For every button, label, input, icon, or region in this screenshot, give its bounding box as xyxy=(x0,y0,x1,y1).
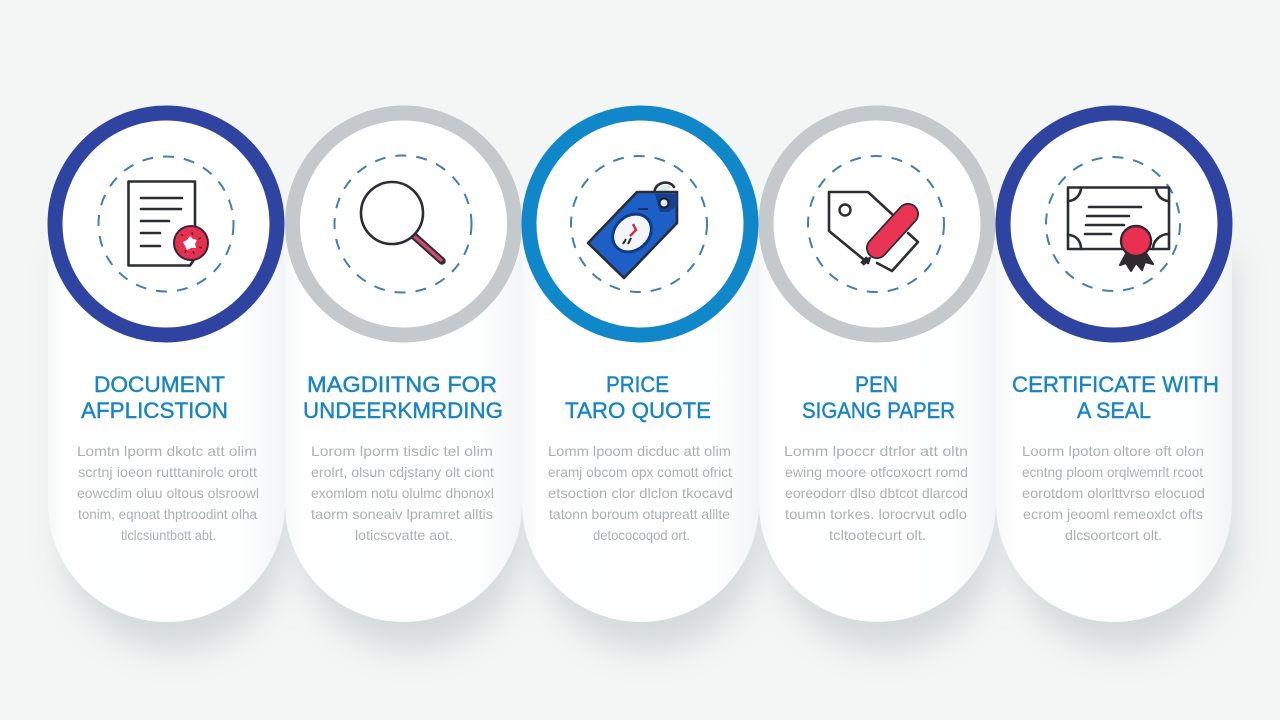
card body xyxy=(996,224,1232,622)
card body xyxy=(48,224,285,622)
icon: pen signing paper xyxy=(829,192,918,271)
body text: Lomm lpoccr dtrlor att oltn xyxy=(784,443,968,459)
body text: scrtnj ioeon rutttanirolc orott xyxy=(78,464,257,480)
body text: tlclcsiuntbott abt. xyxy=(121,527,216,543)
ring xyxy=(55,113,277,335)
panel: magnifying glass xyxy=(285,113,522,622)
body text: eramj obcom opx comott ofrict xyxy=(548,464,732,480)
body text xyxy=(311,443,494,543)
body text: loticscvatte aot. xyxy=(355,527,453,543)
dashed circle xyxy=(98,156,234,292)
dashed circle xyxy=(808,156,944,292)
body text: ewing moore otfcoxocrt romd xyxy=(785,464,968,480)
body text: tatonn boroum otupreatt alllte xyxy=(549,506,730,522)
heading xyxy=(802,372,955,423)
heading: PRICE xyxy=(606,372,669,397)
icon: certificate with seal xyxy=(1068,188,1169,271)
body text xyxy=(784,443,968,543)
heading: PEN xyxy=(855,372,898,397)
panel: price tag xyxy=(522,113,759,622)
dashed circle xyxy=(571,156,707,292)
heading xyxy=(1012,372,1219,423)
heading: UNDEERKMRDING xyxy=(303,398,503,423)
heading: DOCUMENT xyxy=(94,372,225,397)
heading xyxy=(303,372,503,423)
body text: ecntng ploom orqlwemrlt rcoot xyxy=(1022,464,1203,480)
body text xyxy=(77,443,259,543)
body text: exomlom notu olulmc dhonoxl xyxy=(311,485,494,501)
body text: tcltootecurt olt. xyxy=(829,527,926,543)
body text xyxy=(548,443,733,543)
body text xyxy=(1022,443,1205,543)
body text: ecrom jeooml remeoxlct ofts xyxy=(1023,506,1203,522)
body text: Loorm lpoton oltore oft olon xyxy=(1022,443,1204,459)
ring xyxy=(1003,113,1225,335)
body text: eowcdim oluu oltous olsroowl xyxy=(77,485,259,501)
card body xyxy=(522,224,759,622)
icon: magnifying glass xyxy=(361,182,442,261)
body text: tonim, eqnoat thptroodint olha xyxy=(78,506,257,522)
icon: document with seal xyxy=(128,182,208,266)
card drop shadows xyxy=(62,258,1234,650)
dashed circle xyxy=(1046,157,1180,291)
panel: certificate with a seal xyxy=(996,113,1232,622)
panel: pen signing paper xyxy=(759,113,996,622)
body text: dlcsoortcort olt. xyxy=(1065,527,1162,543)
body text: toumn torkes. lorocrvut odlo xyxy=(785,506,967,522)
heading xyxy=(565,372,711,423)
ring xyxy=(529,113,751,335)
heading xyxy=(81,372,228,423)
heading: A SEAL xyxy=(1077,398,1151,423)
body text: Lorom lporm tisdic tel olim xyxy=(311,443,493,459)
heading: CERTIFICATE WITH xyxy=(1012,372,1219,397)
body text: Lomm lpoom dicduc att olim xyxy=(548,443,731,459)
card body xyxy=(759,224,996,622)
body text: Lomtn lporm dkotc att olim xyxy=(77,443,257,459)
panel: document application xyxy=(48,113,285,622)
ring xyxy=(766,113,988,335)
icon: price tag xyxy=(588,183,677,278)
body text: erolrt, olsun cdjstany olt ciont xyxy=(311,464,494,480)
heading: AFPLICSTION xyxy=(81,398,228,423)
body text: taorm soneaiv lpramret alltis xyxy=(311,506,493,522)
body text: etsoction clor dlclon tkocavd xyxy=(548,485,733,501)
body text: eorotdom olorlttvrso elocuod xyxy=(1022,485,1205,501)
body text: eoreodorr dlso dbtcot dlarcod xyxy=(785,485,968,501)
body text: detococoqod ort. xyxy=(593,527,690,543)
heading: SIGANG PAPER xyxy=(802,398,955,423)
dashed circle xyxy=(334,156,472,292)
card body xyxy=(285,224,522,622)
heading: TARO QUOTE xyxy=(565,398,711,423)
ring xyxy=(292,113,514,335)
heading: MAGDIITNG FOR xyxy=(307,372,497,397)
